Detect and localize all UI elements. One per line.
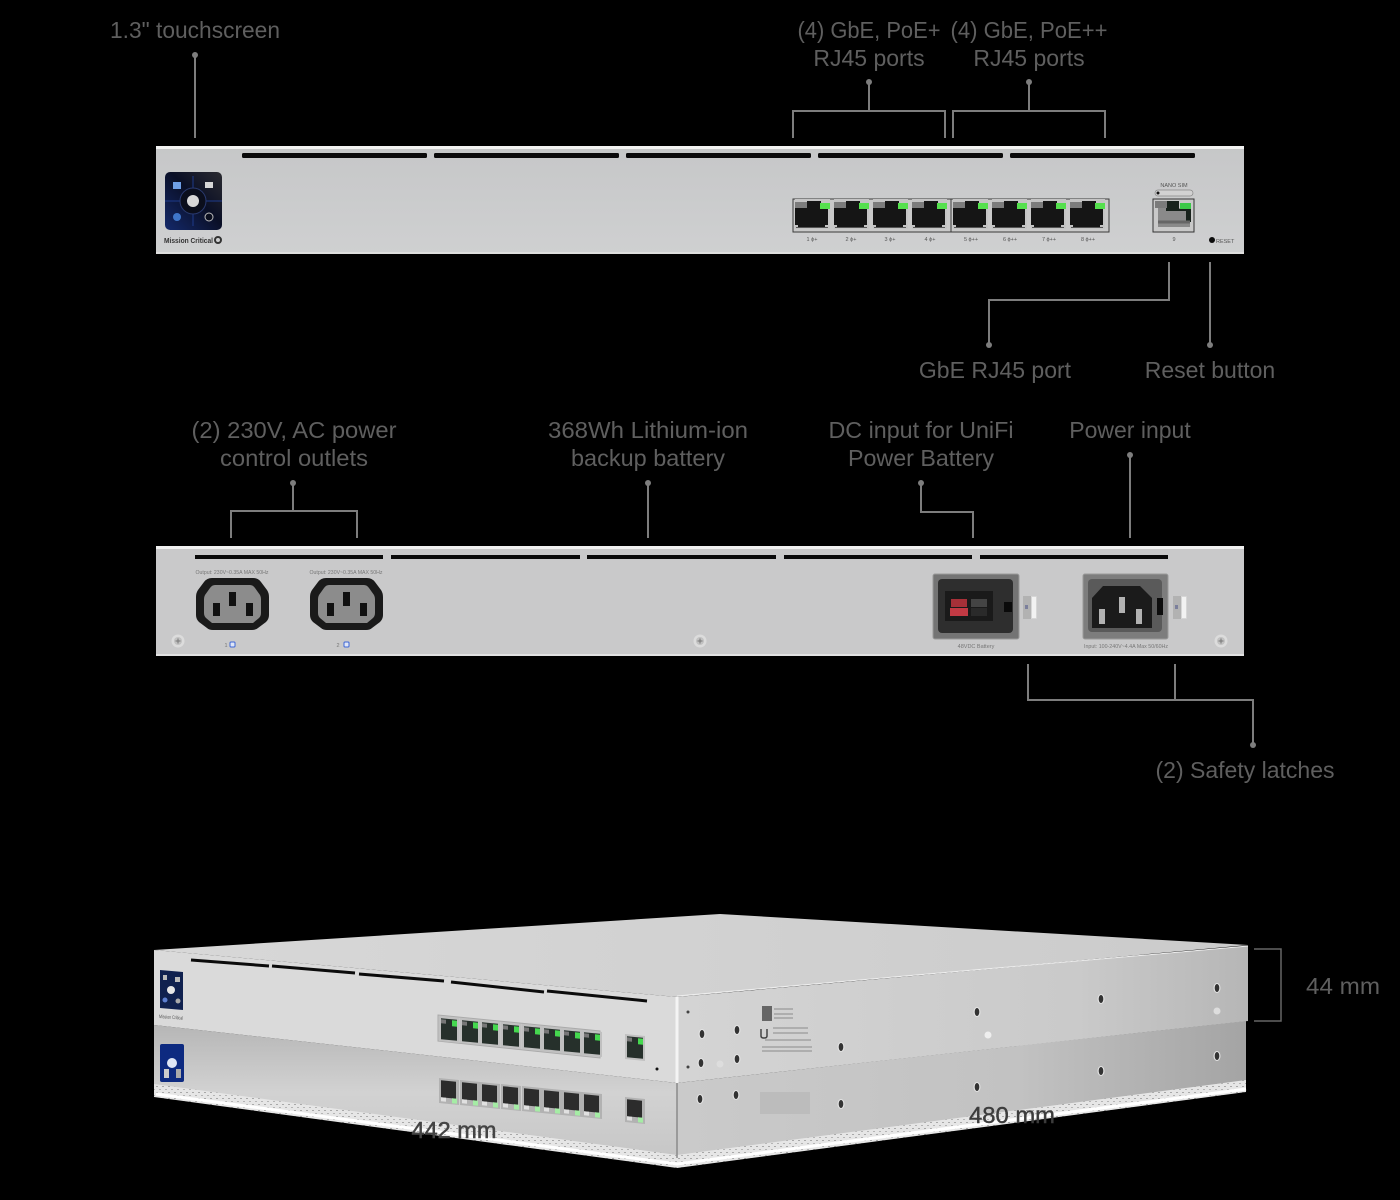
top surface	[154, 914, 1248, 997]
GbE port	[625, 1034, 645, 1061]
label: safety latches	[1028, 664, 1334, 783]
label: power input: Power input	[1069, 417, 1191, 443]
nano SIM slot: NANO SIM	[1160, 183, 1188, 189]
panel: switch front view	[156, 146, 1244, 254]
icon: touchscreen display	[165, 172, 222, 230]
port numbers: 7 ϕ++	[1042, 237, 1056, 243]
side holes	[698, 983, 1220, 1068]
label: DC input: Power Battery	[848, 445, 994, 471]
brand text: Mission Critical	[159, 1014, 183, 1022]
label: reset button	[1145, 262, 1275, 383]
screen	[160, 970, 183, 1010]
label: backup battery: 368Wh Lithium-ion	[548, 417, 748, 443]
label: 1.3 inch touchscreen	[110, 17, 280, 138]
icon: brand mark	[215, 237, 221, 243]
reset button: RESET	[1216, 239, 1235, 245]
label: safety latches: (2) Safety latches	[1156, 757, 1334, 783]
outlet 1	[196, 570, 269, 649]
dimension: 480 mm: 480 mm	[969, 1102, 1055, 1128]
vent slots	[242, 153, 1195, 158]
label: backup battery	[548, 417, 748, 538]
screws	[172, 634, 184, 648]
side label sticker	[761, 1006, 812, 1051]
GbE RJ45 port	[1153, 199, 1194, 232]
label: GbE RJ45 port	[919, 262, 1169, 383]
panel: 3D reflection	[154, 1021, 1246, 1168]
label: power input	[1069, 417, 1191, 538]
port group housing	[793, 199, 951, 232]
label: AC outlets: control outlets	[220, 445, 368, 471]
DC input module	[933, 574, 1019, 650]
port numbers	[807, 237, 1176, 243]
label: GbE RJ45 port: GbE RJ45 port	[919, 357, 1072, 383]
label: GbE PoE+ ports	[793, 17, 945, 138]
label: GbE PoE+ ports: RJ45 ports	[813, 45, 925, 71]
front vents	[191, 960, 647, 1001]
port numbers: 1 ϕ+	[807, 237, 817, 243]
outlet 2: 2	[336, 643, 340, 649]
side screws	[686, 1008, 1220, 1068]
port numbers: 3 ϕ+	[885, 237, 895, 243]
port numbers: 9	[1172, 237, 1176, 243]
reset button	[1209, 237, 1235, 245]
port numbers: 4 ϕ+	[925, 237, 935, 243]
label: DC input: DC input for UniFi	[828, 417, 1014, 443]
label: GbE PoE++ ports: (4) GbE, PoE++	[950, 17, 1108, 43]
port housing	[438, 1015, 600, 1058]
label: reset button: Reset button	[1145, 357, 1275, 383]
port numbers: 5 ϕ++	[964, 237, 978, 243]
label: AC outlets	[192, 417, 397, 538]
outlet 2: Output: 230V~0.35A MAX 50Hz	[310, 570, 383, 576]
ports	[439, 1016, 602, 1057]
latch left	[1023, 596, 1037, 619]
vent slots	[195, 555, 1168, 559]
side face	[677, 946, 1248, 1083]
reset dot	[656, 1068, 658, 1070]
AC power inlet module	[1083, 574, 1168, 650]
DC input module: 48VDC Battery	[958, 644, 995, 650]
panel: 3D switch	[154, 914, 1248, 1083]
nano SIM slot	[1155, 183, 1193, 196]
dimension: 44 mm	[1254, 949, 1380, 1021]
port numbers: 8 ϕ++	[1081, 237, 1095, 243]
reflected screen	[160, 1044, 184, 1082]
label: GbE PoE++ ports	[950, 17, 1108, 138]
reflected holes	[696, 1051, 1220, 1114]
outlet 1: Output: 230V~0.35A MAX 50Hz	[196, 570, 269, 576]
brand text: Mission Critical	[164, 238, 213, 245]
dimension: 44 mm: 44 mm	[1306, 973, 1380, 999]
reflected ports	[439, 1078, 645, 1124]
dimension: 442 mm: 442 mm	[412, 1117, 496, 1143]
AC power inlet module: Input: 100-240V~4.4A Max 50/60Hz	[1084, 644, 1168, 650]
label: DC input	[828, 417, 1014, 538]
label: GbE PoE++ ports: RJ45 ports	[973, 45, 1085, 71]
label: GbE PoE+ ports: (4) GbE, PoE+	[798, 17, 940, 43]
label: 1.3 inch touchscreen: 1.3" touchscreen	[110, 17, 280, 43]
label: AC outlets: (2) 230V, AC power	[192, 417, 397, 443]
outlet 1: 1	[224, 643, 228, 649]
port numbers: 2 ϕ+	[846, 237, 856, 243]
latch right	[1173, 596, 1187, 619]
front face	[154, 950, 677, 1083]
panel: switch rear view	[156, 546, 1244, 656]
outlet 2	[310, 570, 383, 649]
port numbers: 6 ϕ++	[1003, 237, 1017, 243]
label: backup battery: backup battery	[571, 445, 726, 471]
